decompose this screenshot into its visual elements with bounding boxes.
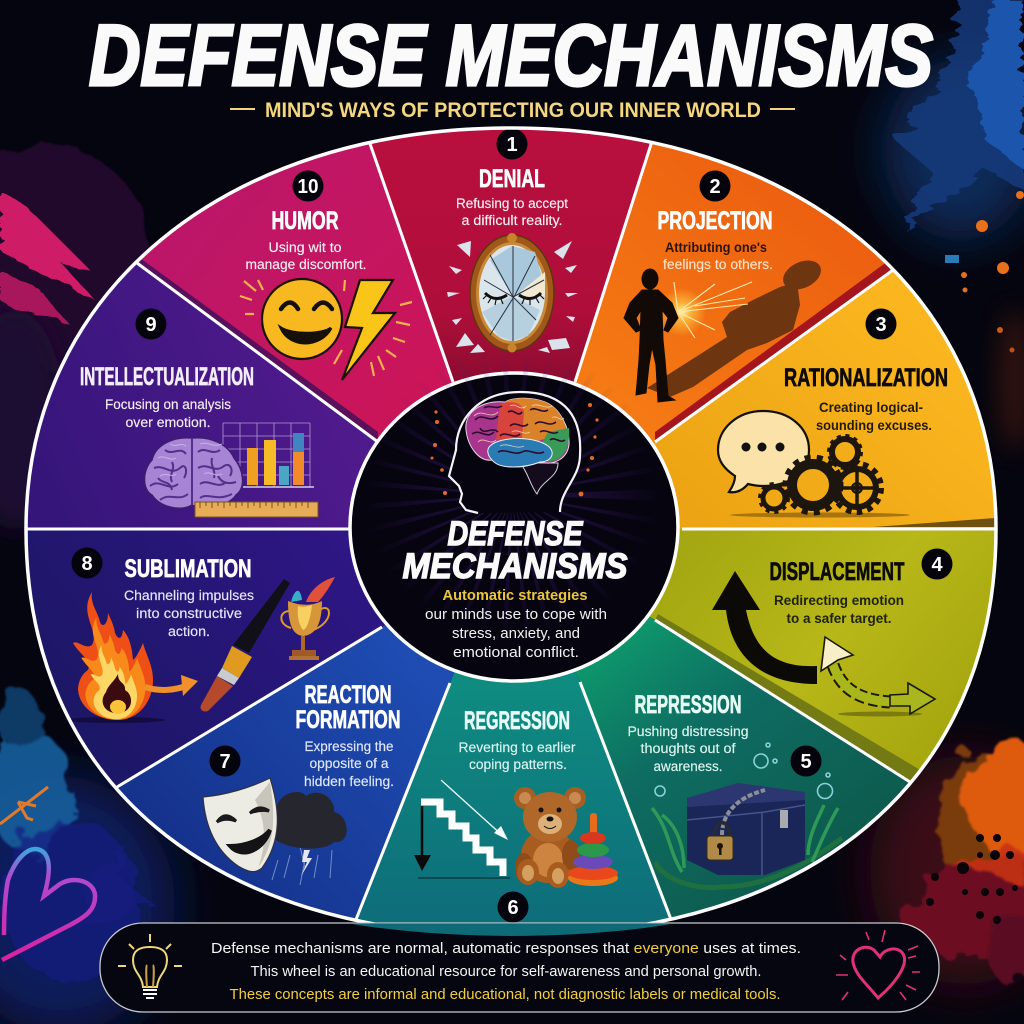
description: sublimation: Channeling impulses xyxy=(124,588,254,603)
description: reaction formation xyxy=(304,739,394,789)
number 6 xyxy=(498,892,528,922)
panel: 6 regression xyxy=(358,672,669,922)
number 7: 7 xyxy=(219,751,231,773)
icon: smiling mask and storm cloud xyxy=(203,778,347,885)
hub description: Automatic strategies xyxy=(442,588,588,604)
description: humor: manage discomfort. xyxy=(246,257,366,272)
heading: reaction formation xyxy=(296,681,400,734)
description: denial xyxy=(456,196,568,228)
description: reaction formation: opposite of a xyxy=(310,756,389,771)
heading: displacement: DISPLACEMENT xyxy=(770,558,904,586)
number 9 xyxy=(136,308,166,340)
number 1 xyxy=(496,128,528,160)
number 3 xyxy=(866,308,896,340)
panel: 1 denial xyxy=(372,130,650,382)
panel: 5 repression xyxy=(576,616,908,918)
description: intellectualization xyxy=(105,397,231,430)
description: displacement xyxy=(774,593,904,626)
description: reaction formation: Expressing the xyxy=(304,739,394,754)
icon: locked chest with bubbles and seaweed xyxy=(652,743,842,888)
hub title xyxy=(402,515,628,586)
icon: descending stairs, teddy bear and stacking rings xyxy=(414,780,618,888)
heading: regression: REGRESSION xyxy=(464,707,570,735)
number 3: 3 xyxy=(875,314,887,336)
number 2 xyxy=(700,170,730,202)
description: reaction formation: hidden feeling. xyxy=(304,774,394,789)
description: repression xyxy=(628,724,748,774)
icon: brain, bar chart and ruler xyxy=(144,423,318,517)
description: denial: Refusing to accept xyxy=(456,196,568,211)
number 10: 10 xyxy=(298,176,318,198)
hub title: MECHANISMS xyxy=(402,547,628,586)
description: regression: coping patterns. xyxy=(469,757,567,772)
doodle: heart lower left xyxy=(2,849,95,960)
number 5 xyxy=(790,746,822,776)
number 7 xyxy=(210,746,240,776)
description: repression: Pushing distressing xyxy=(628,724,748,739)
heading: denial: DENIAL xyxy=(479,165,545,193)
panel: 4 displacement xyxy=(650,529,994,780)
panel: 10 humor xyxy=(138,144,453,440)
description: intellectualization: Focusing on analysis xyxy=(105,397,231,412)
hub description: our minds use to cope with xyxy=(425,607,607,623)
panel: 3 rationalization xyxy=(654,272,994,529)
number 2: 2 xyxy=(709,176,721,198)
panel: 7 reaction formation xyxy=(118,624,454,918)
icon: smiley and lightning bolt xyxy=(240,279,412,380)
subtitle: MIND'S WAYS OF PROTECTING OUR INNER WORLD xyxy=(265,99,761,122)
description: rationalization: sounding excuses. xyxy=(816,418,932,433)
number 6: 6 xyxy=(507,897,519,919)
description: intellectualization: over emotion. xyxy=(126,415,210,430)
description: displacement: Redirecting emotion xyxy=(774,593,904,608)
description: displacement: to a safer target. xyxy=(786,611,892,626)
hub description: emotional conflict. xyxy=(453,645,579,661)
decorative divider shadows and lines xyxy=(26,128,997,936)
description: regression xyxy=(458,740,576,772)
description: regression: Reverting to earlier xyxy=(458,740,576,755)
number 5: 5 xyxy=(800,751,812,773)
number 1: 1 xyxy=(506,134,518,156)
heading: humor: HUMOR xyxy=(272,207,338,235)
footer text xyxy=(211,940,801,1003)
heading: reaction formation: REACTION xyxy=(304,681,392,709)
heading: sublimation: SUBLIMATION xyxy=(124,555,252,583)
panel: 9 intellectualization xyxy=(28,264,376,528)
hub title: DEFENSE xyxy=(448,515,584,553)
footer note xyxy=(100,923,939,1012)
number 10 xyxy=(292,170,324,202)
description: repression: awareness. xyxy=(654,759,722,774)
icon: light bulb xyxy=(118,934,182,998)
icon: flame to brush to trophy xyxy=(65,577,335,723)
number 4 xyxy=(922,548,952,580)
description: projection xyxy=(663,240,773,272)
footer text: Defense mechanisms are normal, automatic responses that everyone uses at times. xyxy=(211,940,801,957)
icon: cracked mirror xyxy=(447,233,578,353)
footer text: This wheel is an educational resource for self-awareness and personal growth. xyxy=(250,963,762,980)
icon: head with rainbow brain xyxy=(430,392,599,513)
heading: rationalization: RATIONALIZATION xyxy=(784,364,948,392)
doodle: arrow lower left xyxy=(0,787,48,824)
description: humor xyxy=(246,240,366,272)
heading: intellectualization: INTELLECTUALIZATION xyxy=(80,363,254,391)
number 9: 9 xyxy=(145,314,157,336)
icon: speech bubble and gears xyxy=(718,411,910,518)
description: denial: a difficult reality. xyxy=(462,213,562,228)
number 8: 8 xyxy=(81,553,93,575)
heading: projection: PROJECTION xyxy=(658,207,772,235)
description: humor: Using wit to xyxy=(268,240,342,255)
icon: pink heart xyxy=(836,930,920,1000)
description: rationalization xyxy=(816,400,932,433)
number 8 xyxy=(72,548,102,578)
center hub xyxy=(350,373,678,681)
description: projection: feelings to others. xyxy=(663,257,773,272)
icon: shadow projection xyxy=(624,255,826,402)
description: projection: Attributing one's xyxy=(665,240,767,255)
description: sublimation: into constructive xyxy=(136,606,242,621)
panel: 2 projection xyxy=(575,144,885,443)
hub description xyxy=(425,588,607,661)
description: sublimation: action. xyxy=(168,624,210,639)
footer text: These concepts are informal and educational, not diagnostic labels or medical tools. xyxy=(230,986,780,1003)
heading: reaction formation: FORMATION xyxy=(296,706,400,734)
number 4: 4 xyxy=(931,554,943,576)
heading: repression: REPRESSION xyxy=(634,691,742,719)
description: sublimation xyxy=(124,588,254,639)
description: repression: thoughts out of xyxy=(640,741,736,756)
icon: displaced arrows xyxy=(712,571,935,716)
hub description: stress, anxiety, and xyxy=(452,626,580,642)
description: rationalization: Creating logical- xyxy=(819,400,923,415)
panel: 8 sublimation xyxy=(28,530,385,786)
